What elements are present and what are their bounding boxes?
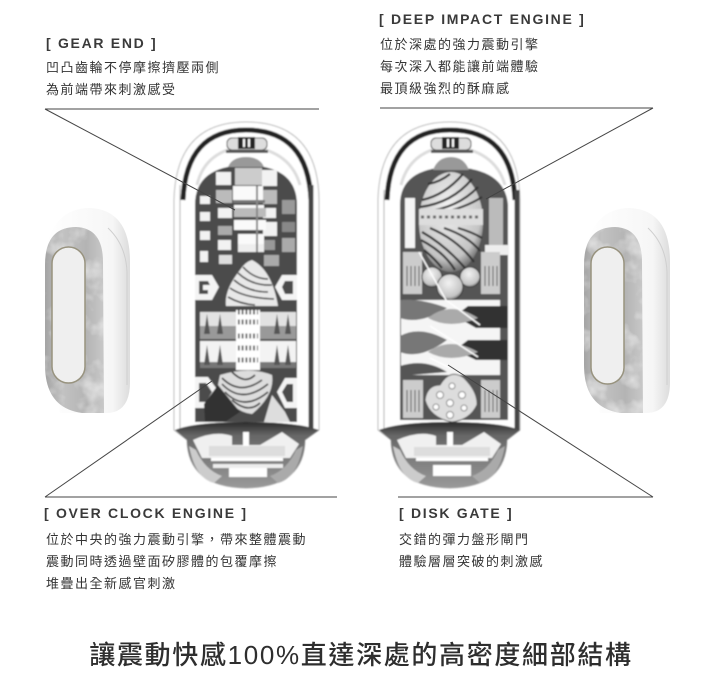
- text: disk gate description: [399, 532, 544, 569]
- columns: [403, 252, 500, 418]
- center ladder: [233, 186, 266, 252]
- text: over clock description: [46, 532, 307, 591]
- text: disk gate description: 體驗層層突破的刺激感: [399, 554, 544, 569]
- leader line: deep impact engine: [380, 108, 653, 199]
- disk gate: [400, 252, 508, 376]
- top twist: [226, 260, 278, 306]
- leader line: over clock engine: [45, 381, 337, 497]
- bottom twist: [204, 370, 272, 422]
- text: gear end description: [46, 60, 220, 97]
- text: over clock description: 震動同時透過壁面矽膠體的包覆摩擦: [46, 554, 278, 569]
- gear blocks: [200, 170, 295, 266]
- side panels: [405, 198, 509, 255]
- top badge: [431, 137, 473, 153]
- leader line: gear end: [45, 109, 319, 210]
- text: deep impact description: 最頂級強烈的酥麻感: [380, 81, 511, 96]
- inner cavity: [195, 165, 297, 422]
- bottom cap: [175, 422, 319, 488]
- heading: over clock engine: [ OVER CLOCK ENGINE ]: [44, 505, 248, 521]
- text: gear end description: 凹凸齒輪不停摩擦擠壓兩側: [46, 60, 220, 75]
- heading: disk gate: [ DISK GATE ]: [399, 505, 513, 521]
- heading: deep impact engine: [ DEEP IMPACT ENGINE ]: [379, 11, 585, 27]
- text: over clock description: 位於中央的強力震動引擎，帶來整體震動: [46, 532, 307, 547]
- inner cavity: [400, 167, 508, 420]
- top badge: [226, 137, 268, 153]
- ribbed ball: [419, 172, 483, 272]
- heading: gear end: [ GEAR END ]: [46, 35, 157, 51]
- product: left side view: [44, 208, 130, 413]
- text: deep impact description: 位於深處的強力震動引擎: [380, 37, 540, 52]
- bumpy gate: [425, 374, 477, 422]
- text: over clock description: 堆疊出全新感官刺激: [46, 576, 177, 591]
- middle body: [200, 310, 296, 370]
- product: right side view: [584, 208, 670, 413]
- text: deep impact description: [380, 37, 540, 96]
- three balls: [422, 267, 480, 300]
- text: deep impact description: 每次深入都能讓前端體驗: [380, 59, 540, 74]
- bottom cap: [379, 422, 520, 488]
- text: gear end description: 為前端帶來刺激感受: [46, 82, 177, 97]
- text: disk gate description: 交錯的彈力盤形閘門: [399, 532, 530, 547]
- title: 讓震動快感100%直達深處的高密度細部結構: [89, 640, 633, 670]
- leader line: disk gate: [398, 365, 653, 497]
- hexagons: [195, 275, 297, 408]
- cutaway: left capsule: [174, 122, 319, 488]
- cutaway: right capsule: [378, 122, 520, 488]
